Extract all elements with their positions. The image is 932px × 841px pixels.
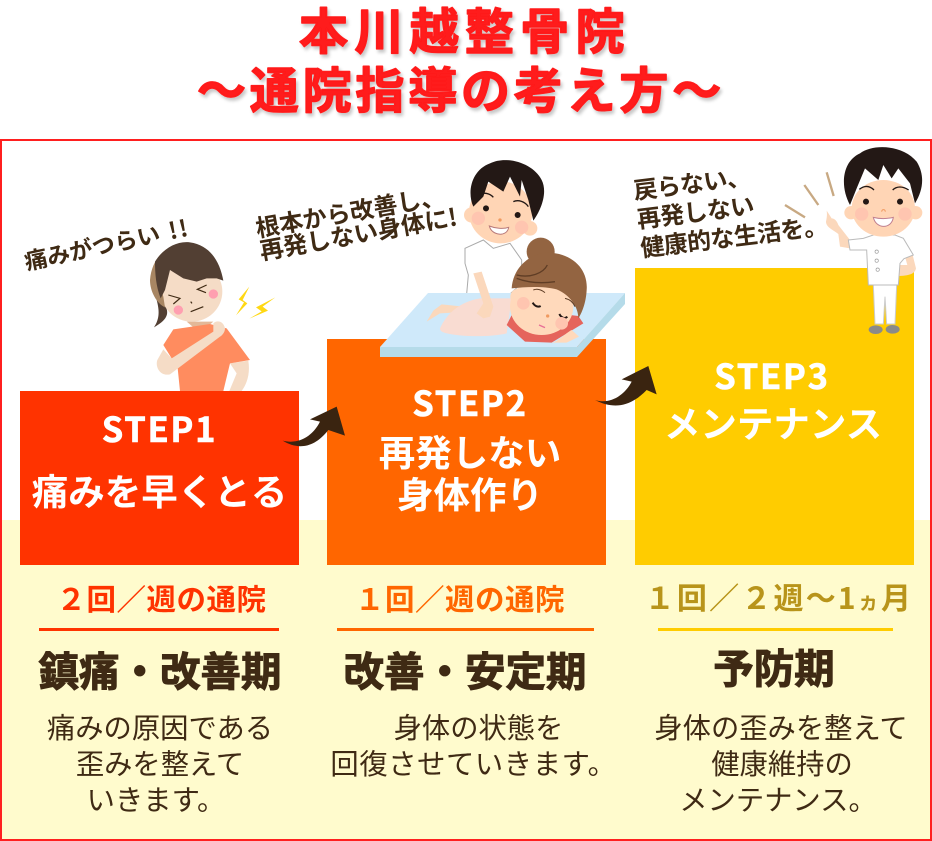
- column 3 details: １回／２週～1ヵ月: [645, 574, 913, 618]
- step 2 box: [327, 339, 606, 565]
- arrow: step 1 to step 2: [283, 407, 345, 446]
- column 3 details: 健康維持の: [711, 742, 853, 783]
- speech: step 3: 健康的な生活を。: [638, 206, 829, 264]
- step 1 box: 痛みを早くとる: [32, 463, 287, 516]
- column 2 details: 身体の状態を: [394, 706, 563, 747]
- illustration: patient lying on mat: [427, 238, 587, 343]
- column 1 details: ２回／週の通院: [56, 577, 267, 619]
- column 2 details: 回復させていきます。: [330, 742, 617, 783]
- illustration: therapist behind massage mat: [464, 160, 544, 294]
- step 3 box: [635, 268, 914, 565]
- step 3 box: STEP3: [714, 349, 830, 399]
- column 3 details: [645, 574, 913, 819]
- column 1 details: いきます。: [87, 778, 225, 819]
- speech: step 1: 痛みがつらい !!: [21, 209, 192, 277]
- speech: step 2: 再発しない身体に!: [256, 197, 460, 267]
- column 2 details: 改善・安定期: [344, 639, 586, 698]
- speech: step 3: [631, 149, 829, 264]
- step 3 box: メンテナンス: [664, 395, 882, 448]
- step 1 box: STEP1: [102, 402, 217, 452]
- column 1 details: 歪みを整えて: [76, 742, 244, 783]
- column 2 details: １回／週の通院: [355, 577, 565, 619]
- illustration: massage mat: [380, 293, 625, 357]
- column 1 details: [38, 577, 282, 819]
- arrow: step 2 to step 3: [595, 366, 657, 406]
- speech: step 3: 再発しない: [635, 186, 756, 235]
- step 2 box: 身体作り: [397, 466, 543, 519]
- illustration: therapist pointing up: [826, 147, 922, 334]
- column 3 details: 身体の歪みを整えて: [654, 706, 908, 747]
- step 1 box: [20, 391, 299, 565]
- column 3 details: メンテナンス。: [679, 778, 877, 819]
- step 2 box: 再発しない: [379, 424, 561, 477]
- column 3 details: 予防期: [713, 636, 835, 695]
- speech: step 3: 戻らない、: [631, 157, 752, 206]
- title: ～通院指導の考え方～: [197, 52, 725, 123]
- title: [197, 0, 725, 123]
- speech: step 2: 根本から改善し、: [253, 176, 447, 244]
- illustration: woman in pain: [150, 242, 250, 391]
- column 2 details: [330, 577, 617, 783]
- column 1 details: 痛みの原因である: [47, 706, 273, 747]
- column 1 details: 鎮痛・改善期: [38, 639, 282, 698]
- icon: pointing emphasis lines: [785, 172, 834, 217]
- icon: pain bolts: [236, 287, 275, 319]
- step 2 box: STEP2: [412, 376, 528, 426]
